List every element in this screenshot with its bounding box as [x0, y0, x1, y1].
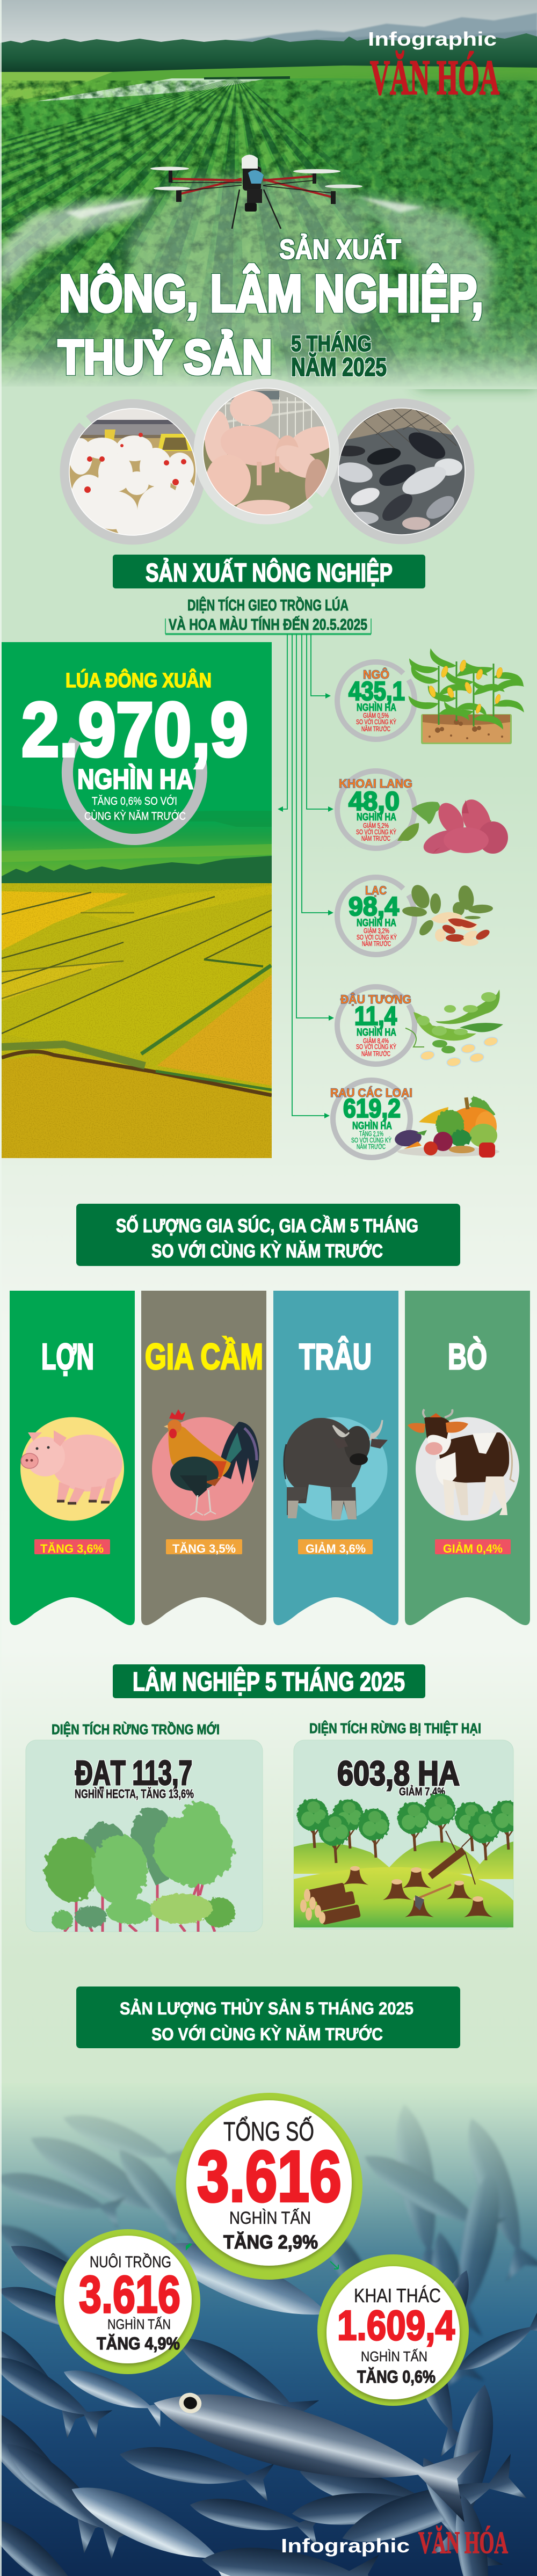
pointer arrows between circles: [186, 2243, 338, 2269]
icon: felled forest: [294, 1793, 522, 1927]
ring: [67, 740, 201, 840]
crop: khoai lang: GIẢM 5,2%: [363, 821, 389, 829]
footer logo: [281, 2525, 508, 2560]
panel: lúa đông xuân: [2, 642, 272, 1158]
panel: diện tích rừng trồng mới: [26, 1721, 263, 1932]
crop rows: [0, 77, 537, 387]
crop: ngô: GIẢM 0,5%: [363, 711, 389, 719]
icon: mixed vegetables: [394, 1095, 499, 1158]
crop: rau các loại: NGHÌN HA: [352, 1120, 392, 1132]
logo: Infographic Văn Hóa: Infographic: [368, 28, 497, 50]
subtitle with bracket: [165, 596, 371, 635]
panel: trâu: GIẢM 3,6%: [306, 1542, 366, 1555]
crop: rau các loại: RAU CÁC LOẠI: [330, 1086, 412, 1100]
icon: soybeans: [405, 989, 503, 1067]
circle: tổng số: TỔNG SỐ: [223, 2116, 314, 2146]
title: THUỶ SẢN: [58, 330, 272, 384]
rice change: [84, 795, 186, 823]
crop: khoai lang: [323, 756, 429, 863]
heading: lâm nghiệp: [113, 1664, 425, 1698]
circle: khai thác: 1.609,4: [337, 2302, 455, 2349]
rice unit: NGHÌN HA: [77, 764, 193, 795]
subtitle with bracket: DIỆN TÍCH GIEO TRỒNG LÚA: [187, 596, 349, 614]
main fish: [144, 2369, 483, 2522]
damage subheading: DIỆN TÍCH RỪNG BỊ THIỆT HẠI: [309, 1720, 481, 1736]
heading: sản lượng thủy sản: [76, 1986, 460, 2048]
circle: khai thác: NGHÌN TẤN: [361, 2348, 427, 2364]
crop: lạc: LẠC: [365, 884, 387, 897]
crop: khoai lang: 48,0: [349, 787, 400, 816]
crop: rau các loại: TĂNG 2,1%: [359, 1130, 383, 1138]
panel: bò: [405, 1291, 530, 1625]
heading: số lượng gia súc, gia cầm: SO VỚI CÙNG KỲ NĂM TRƯỚC: [151, 1240, 383, 1262]
circle: tổng số: NGHÌN TẤN: [229, 2208, 311, 2228]
photo: pigs: [203, 389, 330, 514]
title: NĂM 2025: [291, 353, 387, 382]
panel: lợn: LỢN: [41, 1336, 94, 1377]
circle: nuôi trồng: 3.616: [79, 2265, 180, 2324]
title: [58, 234, 483, 384]
icon: sweet potatoes: [397, 795, 508, 858]
panel: diện tích rừng bị thiệt hại: [294, 1720, 522, 1929]
fish school background: [0, 2083, 537, 2576]
forest card: [26, 1740, 263, 1932]
crop: ngô: SO VỚI CÙNG KỲ: [356, 718, 396, 726]
crop: ngô: NĂM TRƯỚC: [361, 725, 390, 733]
crop: lạc: NĂM TRƯỚC: [362, 940, 391, 948]
damage change: GIẢM 7,4%: [399, 1786, 445, 1798]
damage value: 603,8 HA: [337, 1754, 460, 1793]
crop: lạc: NGHÌN HA: [357, 917, 396, 929]
connector arrows: [278, 634, 334, 1118]
forest subheading: DIỆN TÍCH RỪNG TRỒNG MỚI: [52, 1721, 220, 1737]
heading: sản lượng thủy sản: SO VỚI CÙNG KỲ NĂM TRƯỚC: [151, 2025, 383, 2044]
heading: sản xuất nông nghiệp: SẢN XUẤT NÔNG NGHIỆP: [146, 558, 393, 587]
crop: đậu tương: NGHÌN HA: [357, 1027, 396, 1038]
heading: lâm nghiệp: LÂM NGHIỆP 5 THÁNG 2025: [133, 1667, 405, 1697]
circle: khai thác: TĂNG 0,6%: [357, 2367, 436, 2386]
icon: pig: [21, 1430, 122, 1504]
crop: ngô: NGHÌN HA: [357, 702, 396, 714]
circle: nuôi trồng: [55, 2229, 200, 2374]
crop: lạc: SO VỚI CÙNG KỲ: [357, 933, 397, 941]
photo: chickens: [70, 409, 195, 535]
hero photo: drone spraying a green field: [0, 0, 537, 389]
crop: rau các loại: 619,2: [343, 1094, 401, 1123]
panel: lợn: TĂNG 3,6%: [40, 1542, 104, 1555]
circle: nuôi trồng: TĂNG 4,9%: [97, 2334, 180, 2353]
panel: trâu: [273, 1291, 398, 1625]
crop: đậu tương: ĐẬU TƯƠNG: [340, 993, 411, 1006]
crop: lạc: 98,4: [349, 892, 399, 921]
title: 5 THÁNG: [291, 331, 372, 356]
crop: đậu tương: NĂM TRƯỚC: [361, 1050, 390, 1058]
circle: tổng số: TĂNG 2,9%: [223, 2232, 318, 2253]
panel: gia cầm: GIA CẦM: [145, 1336, 263, 1377]
icon: corn plants: [407, 649, 526, 744]
crop: rau các loại: [318, 1066, 425, 1172]
crop: ngô: NGÔ: [363, 668, 389, 681]
heading: số lượng gia súc, gia cầm: [76, 1204, 460, 1266]
drone: [150, 155, 362, 229]
icon: growing trees: [45, 1802, 235, 1932]
circle: tổng số: [176, 2093, 362, 2280]
circle: khai thác: KHAI THÁC: [354, 2284, 441, 2306]
circle: nuôi trồng: NGHÌN TẤN: [107, 2316, 171, 2332]
crop: khoai lang: NGHÌN HA: [357, 811, 396, 823]
title: SẢN XUẤT: [279, 234, 401, 265]
icon: peanuts: [402, 882, 493, 946]
photo: fish pond: [333, 405, 467, 537]
crop: rau các loại: SO VỚI CÙNG KỲ: [351, 1136, 391, 1144]
subtitle with bracket: VÀ HOA MÀU TÍNH ĐẾN 20.5.2025: [169, 615, 367, 634]
heading: số lượng gia súc, gia cầm: SỐ LƯỢNG GIA SÚC, GIA CẦM 5 THÁNG: [116, 1215, 418, 1236]
rice label: LÚA ĐÔNG XUÂN: [66, 668, 212, 692]
rice change: CÙNG KỲ NĂM TRƯỚC: [84, 810, 186, 823]
logo: Infographic Văn Hóa: [368, 28, 499, 105]
crop: đậu tương: GIẢM 8,4%: [363, 1037, 389, 1045]
forest value: ĐẠT 113,7: [75, 1753, 192, 1792]
footer logo: Infographic: [281, 2535, 410, 2557]
panel: trâu: TRÂU: [299, 1336, 372, 1377]
crop: khoai lang: KHOAI LANG: [339, 777, 412, 790]
crop: ngô: [323, 647, 429, 754]
panel: bò: BÒ: [448, 1336, 487, 1377]
heading: sản lượng thủy sản: SẢN LƯỢNG THỦY SẢN 5 THÁNG 2025: [120, 1999, 413, 2018]
crop: khoai lang: NĂM TRƯỚC: [361, 834, 390, 842]
circle: tổng số: 3.616: [197, 2136, 342, 2217]
rice number: 2.970,9: [21, 687, 248, 773]
spray mist: [0, 177, 494, 344]
icon: buffalo: [284, 1418, 388, 1519]
circle: nuôi trồng: NUÔI TRỒNG: [90, 2253, 171, 2271]
rice field photo: [2, 642, 272, 1158]
icon: cow: [408, 1409, 514, 1515]
crop: đậu tương: [323, 972, 429, 1079]
rice change: TĂNG 0,6% SO VỚI: [92, 795, 177, 807]
crop: khoai lang: SO VỚI CÙNG KỲ: [356, 828, 396, 836]
crop: đậu tương: SO VỚI CÙNG KỲ: [356, 1043, 396, 1051]
damage card: [294, 1740, 513, 1929]
crop: đậu tương: 11,4: [354, 1002, 397, 1031]
circle: khai thác: [317, 2254, 469, 2406]
three round photos: [37, 355, 498, 568]
crop: ngô: 435,1: [349, 677, 405, 706]
icon: rooster: [164, 1409, 259, 1515]
heading: sản xuất nông nghiệp: [113, 555, 425, 588]
panel: bò: GIẢM 0,4%: [443, 1542, 503, 1555]
crop: lạc: GIẢM 3,2%: [364, 927, 389, 935]
crop: lạc: [323, 863, 429, 969]
panel: gia cầm: [141, 1291, 266, 1625]
panel: lợn: [10, 1291, 135, 1625]
crop: rau các loại: NĂM TRƯỚC: [357, 1143, 386, 1151]
forest change: NGHÌN HECTA, TĂNG 13,6%: [75, 1786, 194, 1801]
panel: gia cầm: TĂNG 3,5%: [172, 1542, 236, 1555]
